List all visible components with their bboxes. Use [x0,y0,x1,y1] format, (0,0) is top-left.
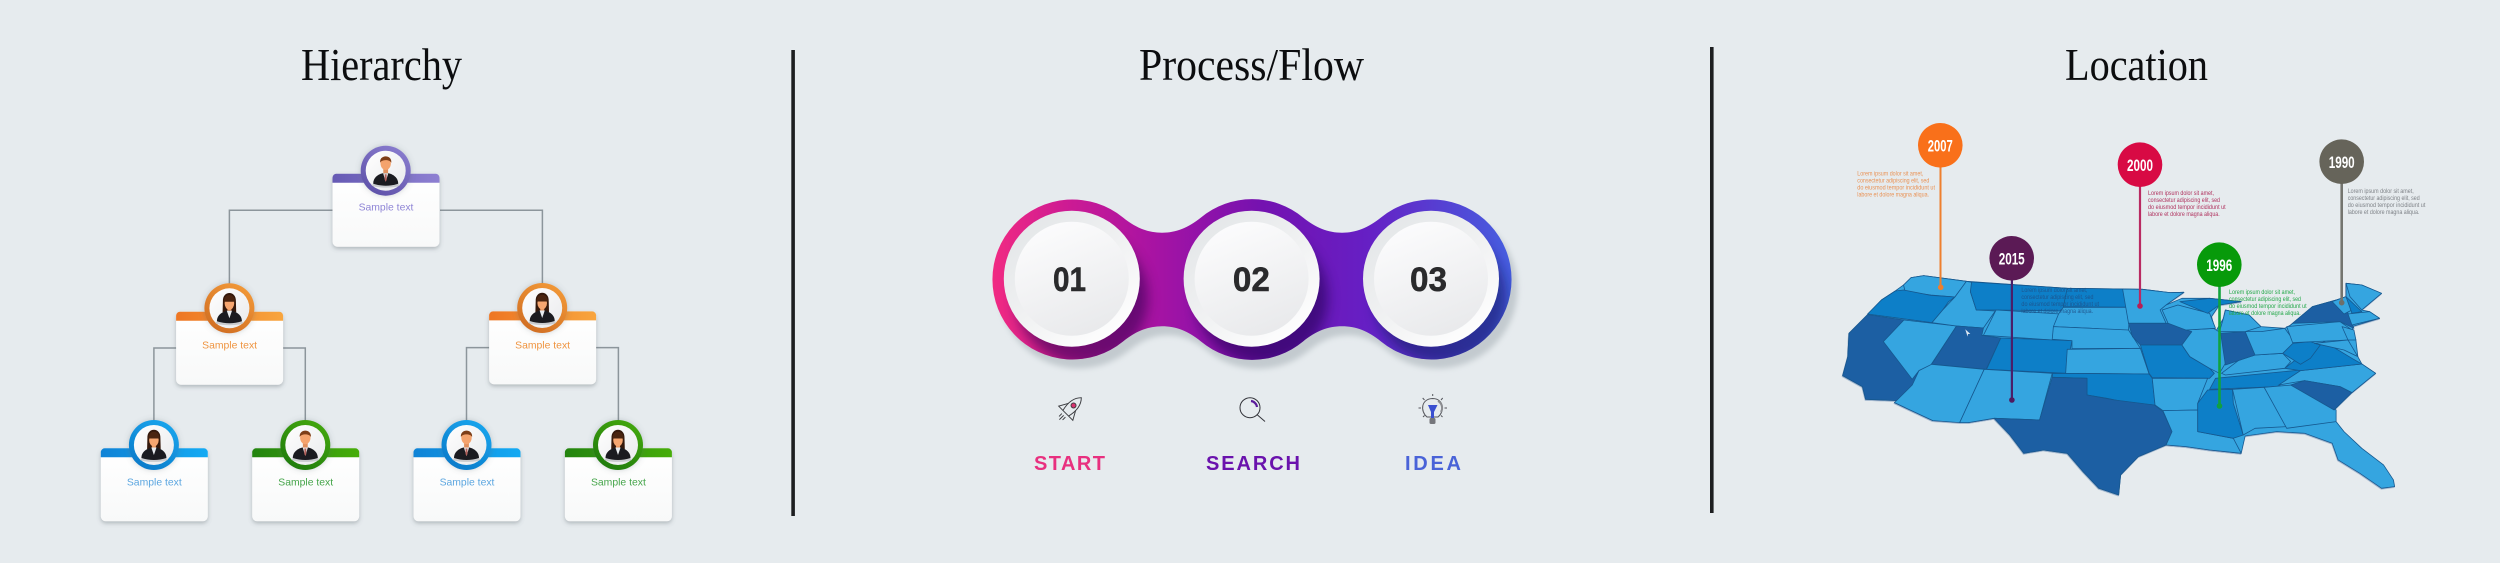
text block: 1990: labore et dolore magna aliqua. [2348,209,2420,216]
text block: 2007 [1857,170,1935,198]
connector lines [154,210,618,421]
card: bottom blue 1: Sample text [127,477,182,488]
text block: 1996: labore et dolore magna aliqua. [2229,310,2301,317]
card: right orange: Sample text [515,340,570,351]
step 02 circle [1184,211,1320,347]
icon: magnifier [1240,398,1265,422]
card: bottom green 2: Sample text [591,477,646,488]
text block: 2015 [2021,287,2099,315]
card: left orange: Sample text [202,341,257,352]
title: Process/Flow: Process/Flow [1139,39,1365,90]
text block: 2015: consectetur adipiscing elit, sed [2021,294,2094,301]
pin: 1990 [2319,139,2364,306]
title: Location: Location [2065,39,2208,90]
text block: 1996 [2229,289,2307,317]
text block: 1996: consectetur adipiscing elit, sed [2229,296,2301,303]
pin: 2007 [1918,123,1963,290]
pin: 1996: 1996 [2206,256,2232,275]
panel: process flow [992,199,1518,475]
text block: 2000: Lorem ipsum dolor sit amet, [2148,190,2214,197]
text block: 2015: do eiusmod tempor incididunt ut [2021,301,2099,308]
pin: 2000: 2000 [2127,156,2153,175]
text block: 1990 [2348,188,2426,216]
pin: 2015 [1989,236,2034,403]
card: right orange [489,283,596,384]
text block: 2015: Lorem ipsum dolor sit amet, [2021,287,2088,294]
pin: 2007: 2007 [1928,136,1953,156]
card: bottom green 2 [565,420,672,521]
text block: 2000: consectetur adipiscing elit, sed [2148,197,2220,204]
icon: light bulb [1418,394,1447,424]
panel: location map [1843,123,2426,495]
card: top purple [332,146,440,247]
card: left orange [176,283,283,385]
divider right [1710,47,1714,513]
card: top purple: Sample text [359,203,414,214]
divider left [791,50,795,516]
card: bottom blue 2 [414,420,520,521]
label: IDEA: IDEA [1405,453,1461,475]
text block: 2000: do eiusmod tempor incididunt ut [2148,204,2226,211]
US states map [1843,276,2395,495]
text block: 2007: consectetur adipiscing elit, sed [1857,178,1930,184]
step 01 circle: 01 [1053,261,1086,299]
icon: rocket [1052,391,1088,427]
step 01 circle [1004,211,1140,347]
label: SEARCH: SEARCH [1206,453,1300,475]
pin: 1996 [2197,242,2242,409]
pin: 2015: 2015 [1999,250,2025,268]
text block: 1996: Lorem ipsum dolor sit amet, [2229,289,2295,296]
card: bottom blue 1 [101,420,208,521]
text block: 2007: labore et dolore magna aliqua. [1857,192,1929,198]
pin: 2000 [2118,142,2162,309]
panel: hierarchy org chart [101,146,672,521]
step 02 circle: 02 [1233,261,1270,299]
title: Hierarchy: Hierarchy [301,39,462,90]
text block: 2000 [2148,190,2226,218]
gradient connected blob [992,199,1518,369]
text block: 1990: consectetur adipiscing elit, sed [2348,195,2420,202]
text block: 1990: Lorem ipsum dolor sit amet, [2348,188,2414,195]
text block: 2000: labore et dolore magna aliqua. [2148,211,2220,218]
pin: 1990: 1990 [2329,153,2355,172]
label: START: START [1034,453,1105,475]
card: bottom blue 2: Sample text [440,477,495,488]
step 03 circle: 03 [1410,261,1447,299]
text block: 2007: Lorem ipsum dolor sit amet, [1857,170,1924,178]
step 03 circle [1363,211,1499,347]
text block: 1996: do eiusmod tempor incididunt ut [2229,303,2307,310]
card: bottom green 1: Sample text [278,477,333,488]
text block: 2007: do eiusmod tempor incididunt ut [1857,184,1935,192]
text block: 2015: labore et dolore magna aliqua. [2021,308,2093,315]
card: bottom green 1 [252,420,359,521]
text block: 1990: do eiusmod tempor incididunt ut [2348,202,2426,209]
